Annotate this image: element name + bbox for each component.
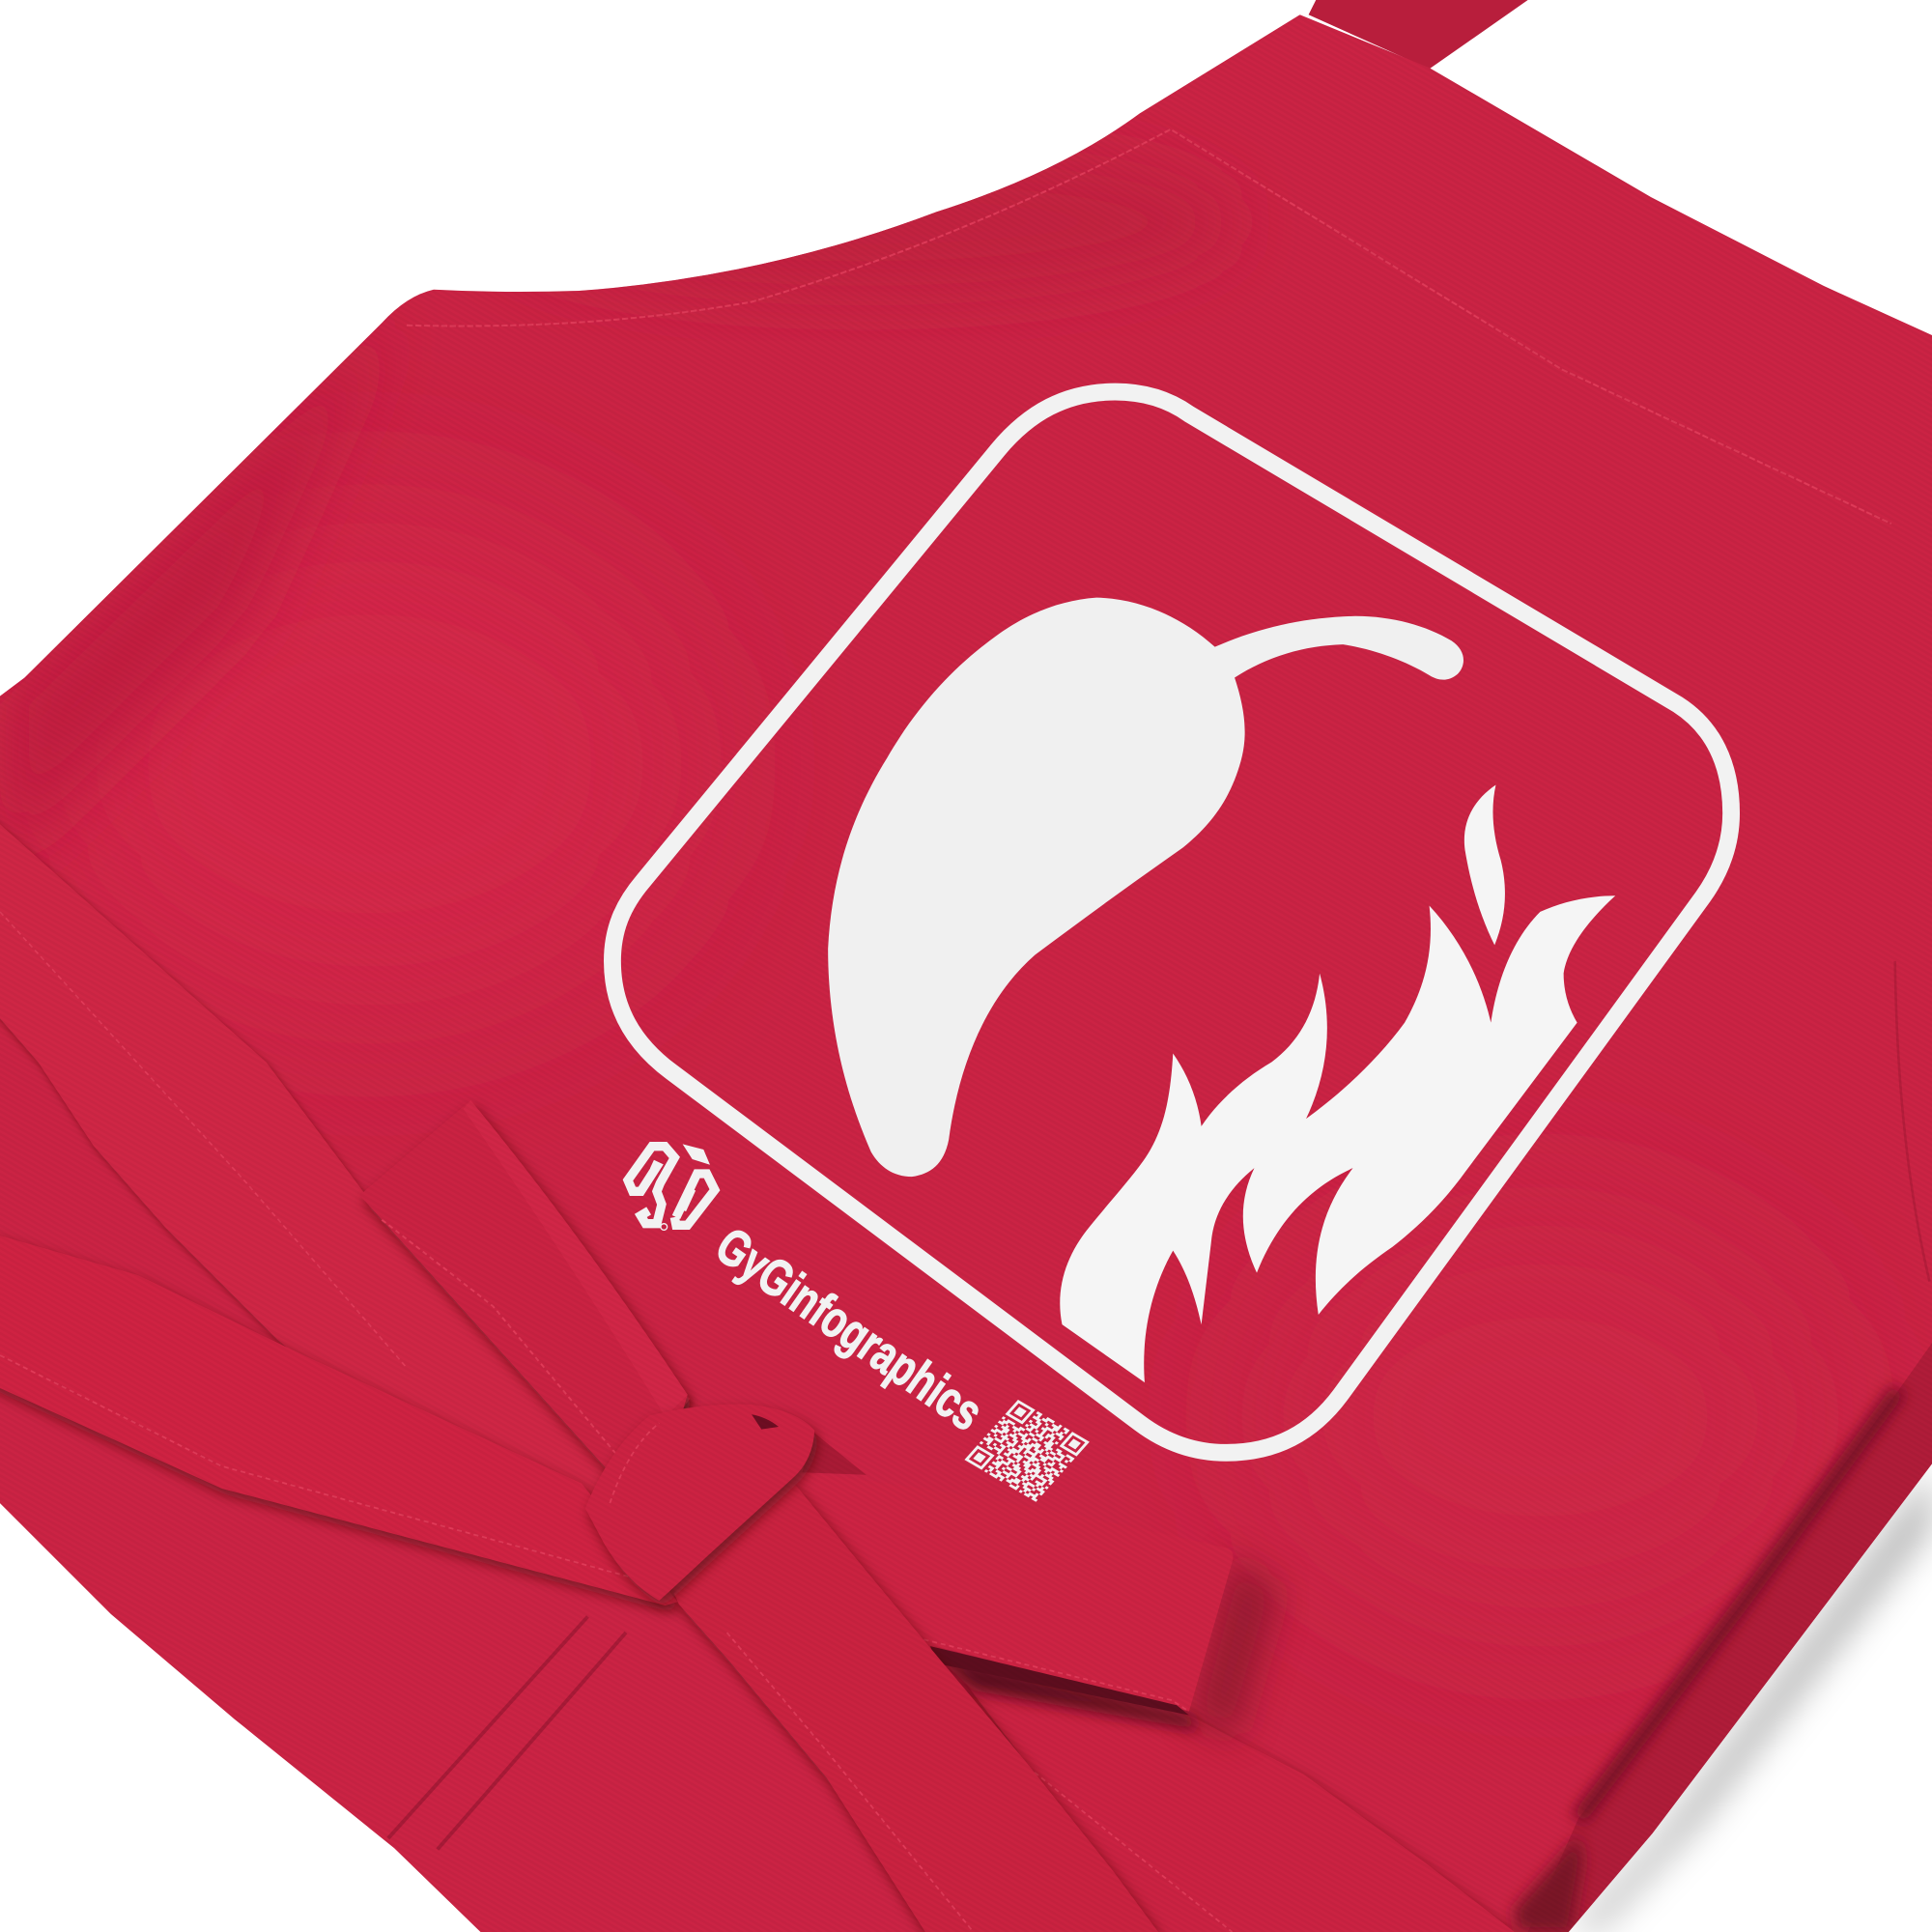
upper waist strap — [0, 813, 690, 1503]
icon: chili pepper — [828, 598, 1463, 1177]
QR data modules — [964, 1400, 1090, 1502]
fabric light and shade — [0, 148, 1811, 1614]
QR code — [964, 1400, 1090, 1502]
icon: flame droplet — [1464, 784, 1505, 945]
QR finder patterns — [964, 1400, 1090, 1502]
rounded square outline — [612, 392, 1731, 1453]
cast shadow on background — [1573, 1468, 1932, 1932]
pocket seams — [388, 1616, 626, 1850]
folded strap flap — [359, 1100, 688, 1509]
right seam — [1895, 961, 1929, 1282]
front strap tail — [674, 1481, 1158, 1932]
right strap tail — [923, 1551, 1291, 1745]
icon: flames — [1060, 895, 1615, 1382]
second lower strap tail — [960, 1676, 1515, 1932]
right fold band — [1513, 1343, 1932, 1932]
strap piece behind knot — [802, 1433, 867, 1475]
neck strap — [1309, 0, 1528, 69]
brand name: GyGinfographics — [705, 1217, 993, 1442]
knot — [585, 1405, 814, 1601]
top hem seam — [407, 129, 1891, 524]
logo mark — [628, 1144, 715, 1230]
lower waist strap — [0, 1233, 678, 1605]
